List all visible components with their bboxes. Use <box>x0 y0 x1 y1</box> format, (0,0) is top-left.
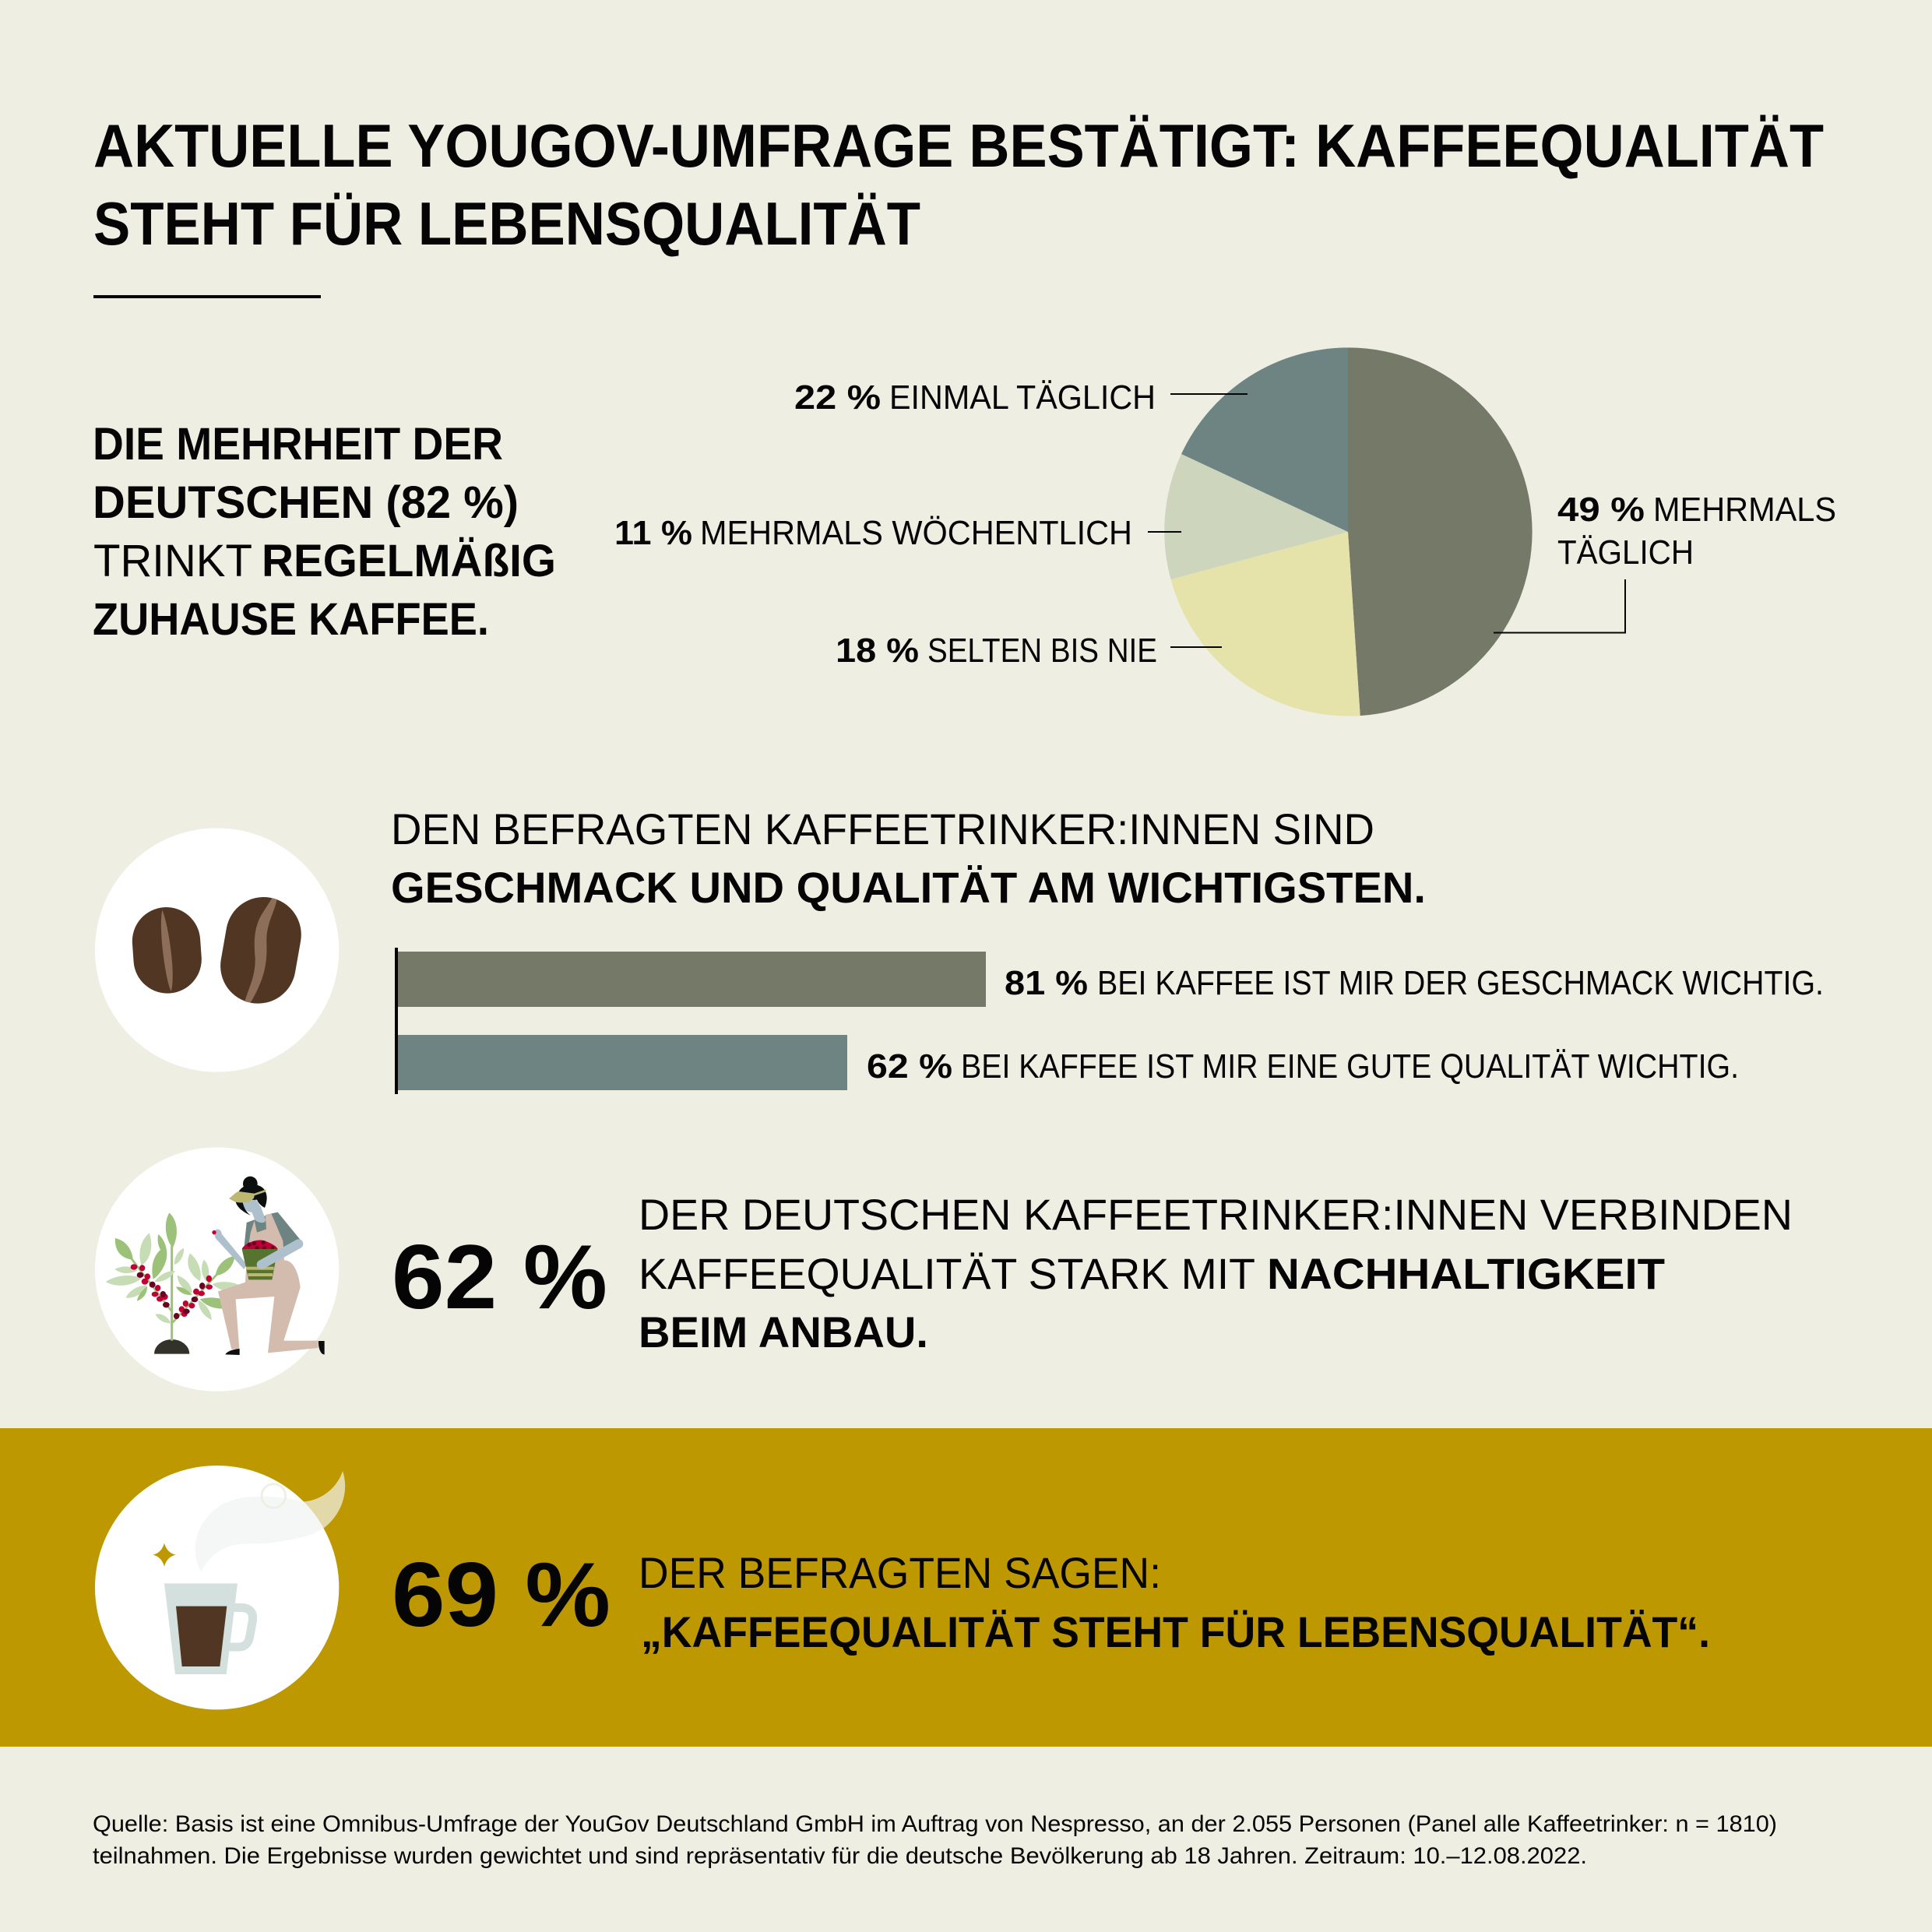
text block: sustainability <box>639 1190 1793 1357</box>
pie label: 18 % selten bis nie: SELTEN BIS NIE <box>927 632 1157 670</box>
text block: sustainability: BEIM ANBAU. <box>639 1307 928 1357</box>
source note: teilnahmen. Die Ergebnisse wurden gewichtet und sind repräsentativ für die deutsche Bevölkerung ab 18 Jahren. Zeitraum: 10.–12.08.2022. <box>93 1843 1587 1869</box>
text block: majority statement: DEUTSCHEN (82 %) <box>93 477 519 528</box>
bar label: 62 %: BEI KAFFEE IST MIR EINE GUTE QUALITÄT WICHTIG. <box>961 1047 1739 1086</box>
icon: steam inside circle <box>195 1497 324 1571</box>
source note: Quelle: Basis ist eine Omnibus-Umfrage der YouGov Deutschland GmbH im Auftrag von Nespresso, an der 2.055 Personen (Panel alle Kaffeetrinker: n = 1810) <box>93 1811 1777 1837</box>
section heading: taste and quality: DEN BEFRAGTEN KAFFEETRINKER:INNEN SIND <box>391 804 1374 853</box>
text block: majority statement <box>93 419 556 645</box>
big number: 62 %: 62 % <box>392 1226 607 1328</box>
title: STEHT FÜR LEBENSQUALITÄT <box>93 189 920 258</box>
bar chart <box>395 948 986 1094</box>
text block: quality of life quote <box>639 1548 1710 1656</box>
bar label: 81 %: 81 % <box>1005 964 1088 1002</box>
icon: coffee plant <box>106 1212 245 1354</box>
text block: majority statement: DIE MEHRHEIT DER <box>93 419 503 470</box>
text block: quality of life quote: DER BEFRAGTEN SAGEN: <box>639 1548 1161 1597</box>
source note <box>93 1811 1777 1869</box>
text block: majority statement: TRINKT <box>93 536 252 586</box>
pie chart <box>1164 347 1533 716</box>
icon: coffee cup with steam <box>95 1466 345 1709</box>
icon: left bean <box>130 905 204 996</box>
pie label: 22 % einmal täglich: EINMAL TÄGLICH <box>889 378 1156 417</box>
text block: quality of life quote: „KAFFEEQUALITÄT STEHT FÜR LEBENSQUALITÄT“. <box>641 1607 1710 1656</box>
pie label: 22 % einmal täglich <box>794 378 1248 417</box>
pie label: 49 % mehrmals täglich: 49 % <box>1557 491 1645 529</box>
bar label: 81 %: BEI KAFFEE IST MIR DER GESCHMACK WICHTIG. <box>1097 964 1824 1002</box>
text block: majority statement: REGELMÄßIG <box>262 536 556 586</box>
bar label: 62 %: 62 % <box>867 1047 952 1086</box>
icon: cup <box>164 1583 253 1674</box>
pie label: 18 % selten bis nie <box>836 632 1222 670</box>
highlight band <box>0 1428 1932 1747</box>
pie label: 22 % einmal täglich: 22 % <box>794 378 881 417</box>
pie label: 11 % mehrmals wöchentlich: 11 % <box>614 514 692 552</box>
icon: right bean <box>214 891 307 1009</box>
pie label: 18 % selten bis nie: 18 % <box>836 632 919 670</box>
title: AKTUELLE YOUGOV-UMFRAGE BESTÄTIGT: KAFFEEQUALITÄT <box>93 111 1824 180</box>
text block: sustainability: DER DEUTSCHEN KAFFEETRINKER:INNEN VERBINDEN <box>639 1190 1793 1239</box>
pie label: 49 % mehrmals täglich <box>1494 491 1836 632</box>
title <box>93 111 1824 258</box>
pie label: 11 % mehrmals wöchentlich: MEHRMALS WÖCHENTLICH <box>700 514 1132 552</box>
icon: farmer picking coffee cherries <box>95 1147 339 1392</box>
big number: 69 %: 69 % <box>392 1543 611 1645</box>
icon: steam outside circle <box>195 1471 345 1571</box>
icon: farmer figure <box>212 1177 325 1355</box>
text block: sustainability: NACHHALTIGKEIT <box>1267 1249 1665 1298</box>
text block: sustainability: KAFFEEQUALITÄT STARK MIT <box>639 1249 1255 1298</box>
icon: sparkle <box>153 1543 176 1567</box>
pie label: 49 % mehrmals täglich: MEHRMALS <box>1653 491 1836 529</box>
icon: coffee beans <box>95 828 339 1072</box>
section heading: taste and quality <box>391 804 1426 912</box>
pie label: 49 % mehrmals täglich: TÄGLICH <box>1557 533 1694 572</box>
section heading: taste and quality: GESCHMACK UND QUALITÄT AM WICHTIGSTEN. <box>391 863 1426 912</box>
text block: majority statement: ZUHAUSE KAFFEE. <box>93 594 489 645</box>
